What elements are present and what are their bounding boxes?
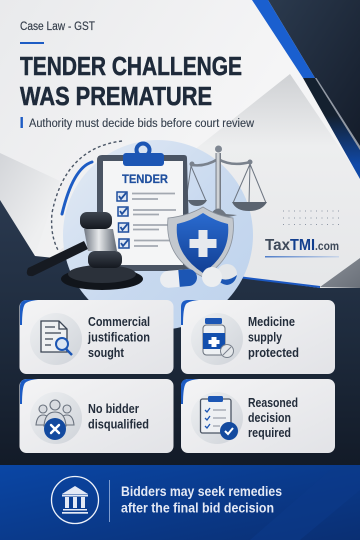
card: medicine supply protected (181, 300, 335, 374)
card: commercial justification (20, 300, 174, 374)
icon: document with magnifier (41, 321, 72, 355)
card text: sought (88, 346, 125, 360)
hero illustration (27, 140, 267, 330)
scales of justice (186, 146, 267, 217)
TaxTMI logo: TMI (290, 237, 315, 254)
card text: decision (248, 411, 291, 425)
dot grid (283, 211, 342, 224)
title: TENDER CHALLENGE (20, 53, 242, 81)
card: reasoned decision required (181, 379, 335, 453)
clipboard (97, 144, 190, 271)
icon: medicine bottle (203, 318, 234, 358)
icon: people with cross (36, 400, 74, 440)
dark lower background (0, 200, 360, 470)
blue arc (62, 162, 92, 214)
medical cross (190, 230, 216, 257)
banner text: after the final bid decision (121, 500, 274, 516)
TaxTMI logo: Tax (265, 237, 290, 254)
clipboard heading: TENDER (122, 172, 168, 186)
card text: Reasoned (248, 396, 298, 410)
card text: No bidder (88, 402, 139, 416)
card: no bidder disqualified (20, 379, 174, 453)
bottom banner (0, 465, 360, 540)
shield (168, 207, 233, 277)
card text: Medicine (248, 315, 295, 329)
gavel (27, 212, 143, 290)
card text: required (248, 426, 291, 440)
pills (159, 264, 237, 289)
TaxTMI logo (265, 237, 339, 257)
icon: checklist clipboard (200, 396, 238, 440)
title: WAS PREMATURE (20, 83, 212, 111)
eyebrow: Case Law - GST: Case Law - GST (20, 21, 95, 33)
card text: protected (248, 346, 299, 360)
eyebrow accent line (20, 42, 44, 44)
dark corner with blue stripe (252, 0, 360, 179)
halo circle (63, 140, 253, 330)
decorative grey facets (0, 74, 360, 290)
dashed arc (52, 141, 122, 250)
card text: supply (248, 330, 282, 344)
subtitle: Authority must decide bids before court review (29, 118, 255, 130)
TaxTMI logo: .com (315, 239, 339, 253)
banner text: Bidders may seek remedies (121, 484, 282, 499)
card text: disqualified (88, 418, 149, 432)
card text: justification (87, 330, 150, 344)
icon: institution building (52, 476, 98, 524)
card text: Commercial (88, 315, 150, 329)
checklist (117, 192, 176, 248)
